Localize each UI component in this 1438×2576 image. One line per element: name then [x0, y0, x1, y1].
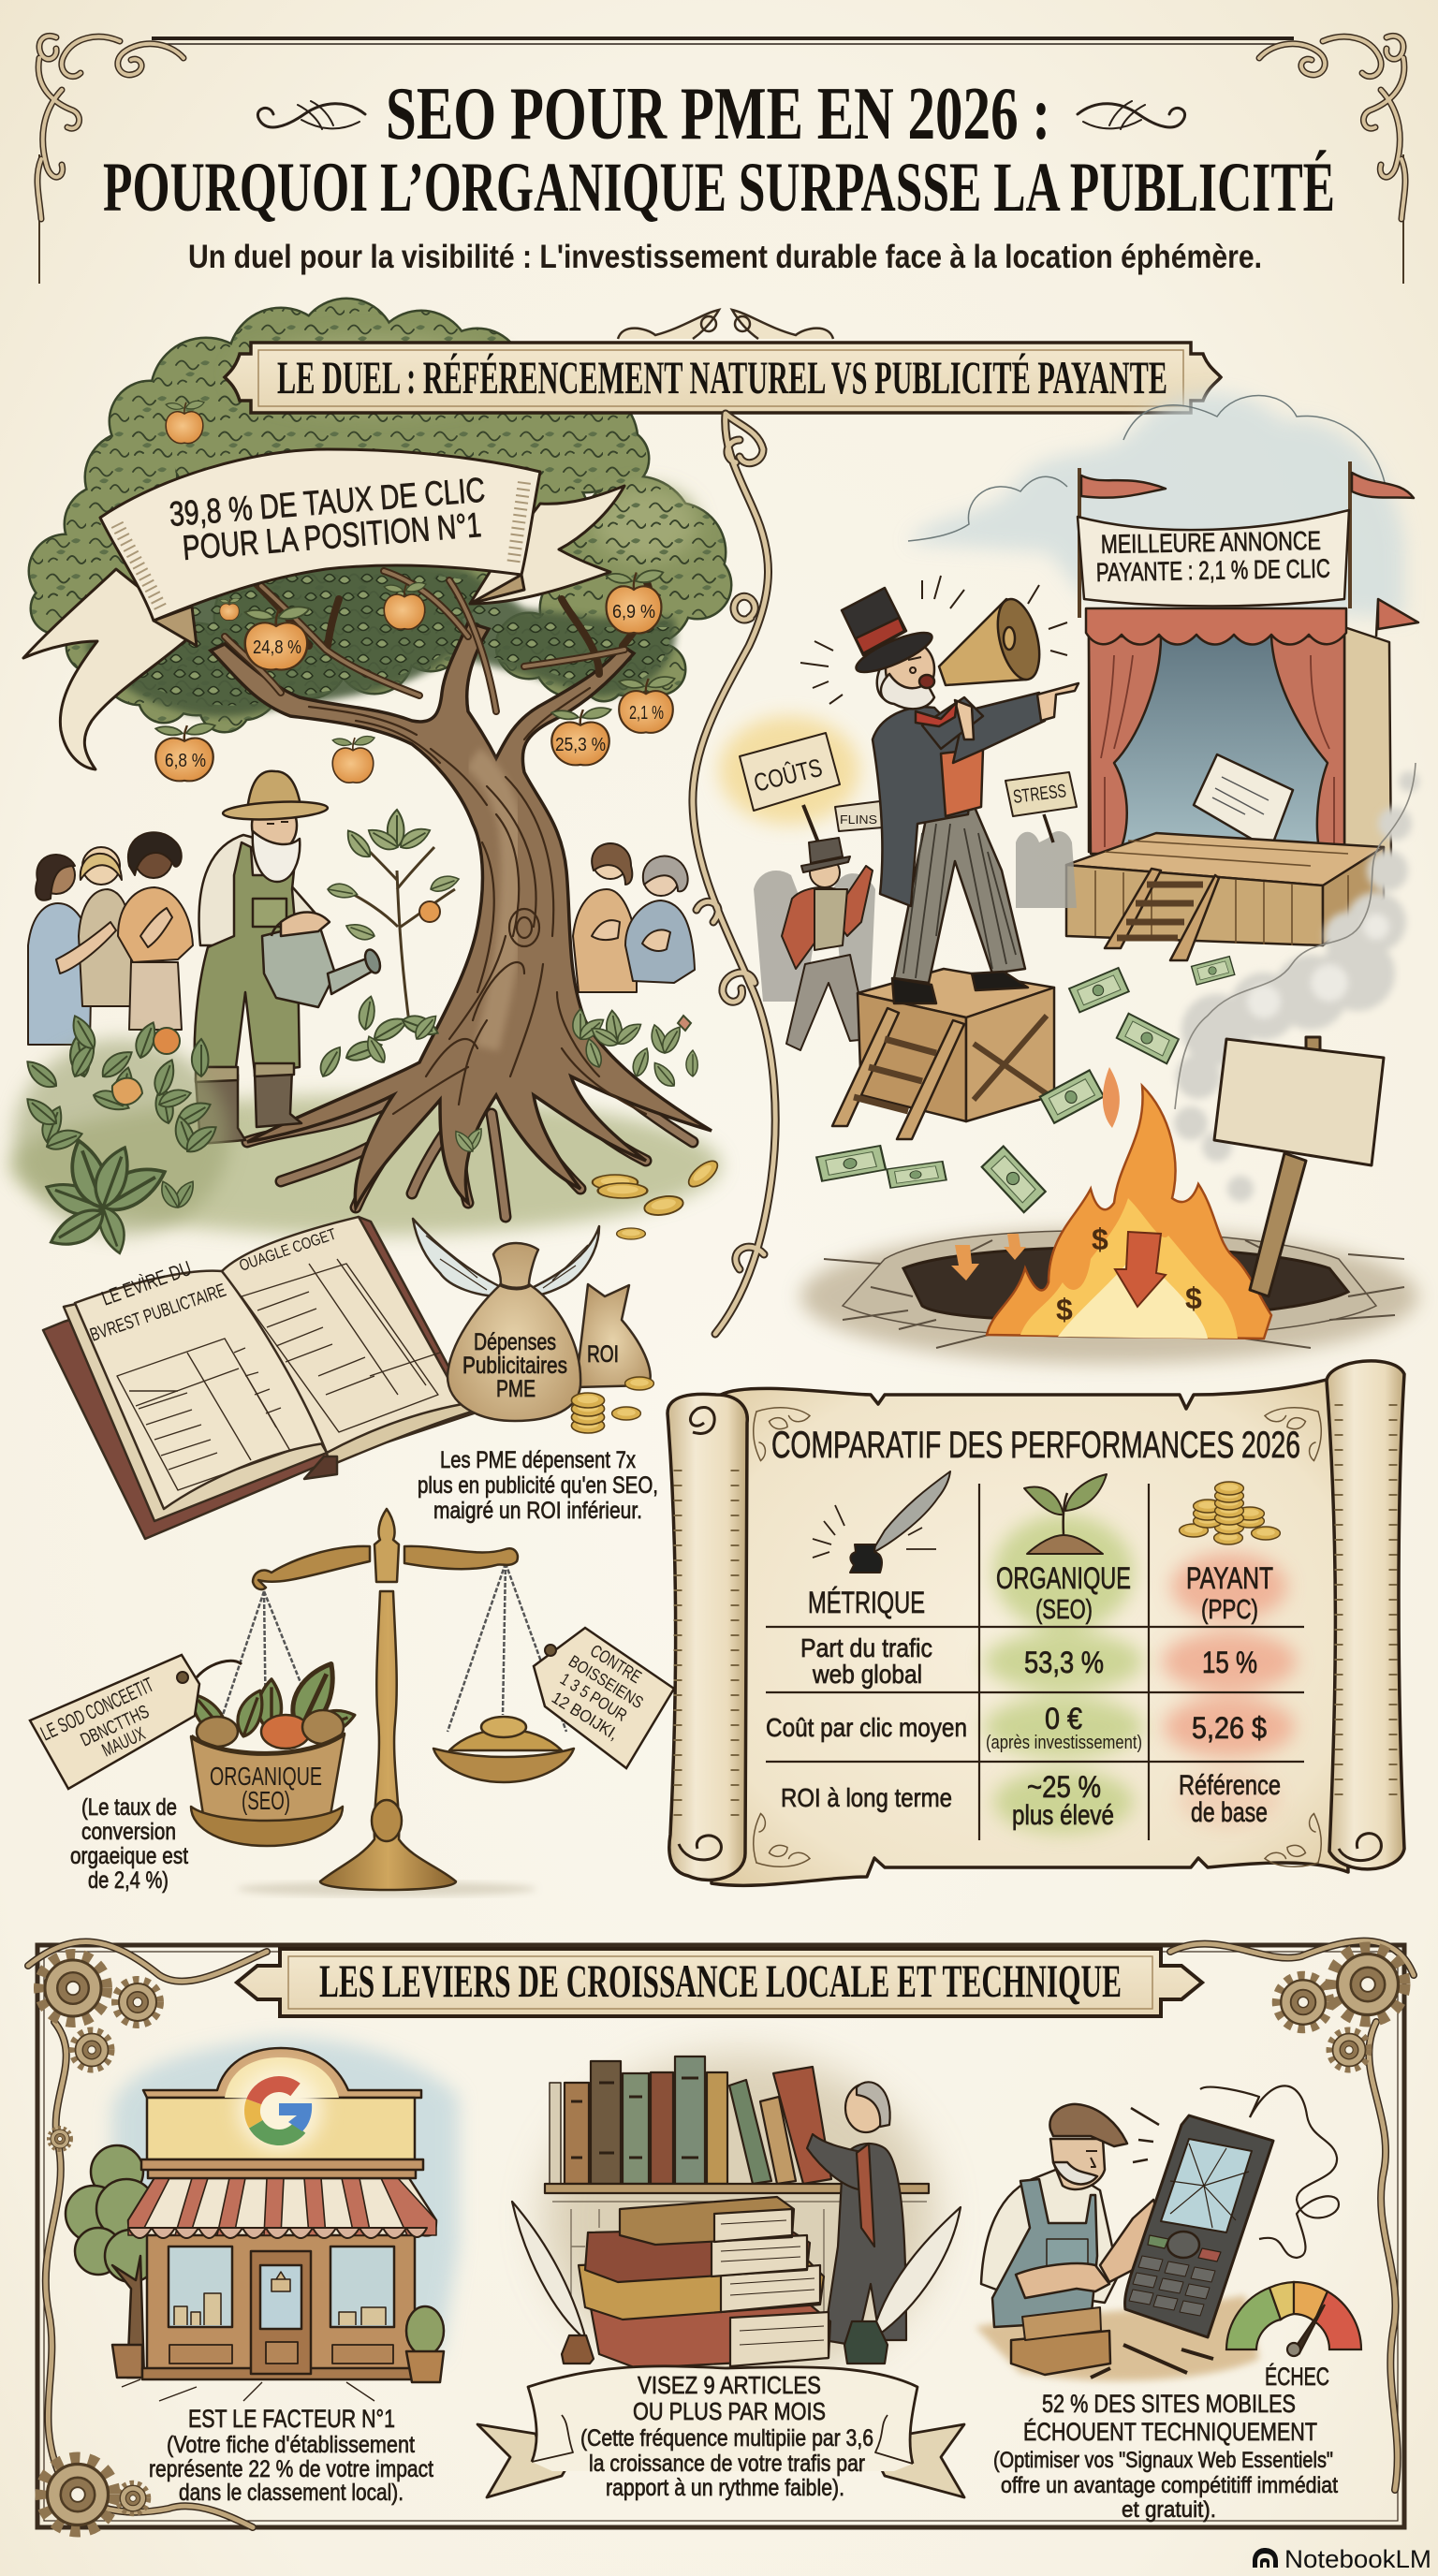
clouds [908, 393, 1404, 618]
farmer with watering can [195, 771, 383, 1144]
column headers: PAYANT [1186, 1561, 1273, 1595]
tools [1091, 2345, 1213, 2378]
flames [987, 1086, 1271, 1339]
table rules [766, 1484, 1304, 1840]
ribbon text: articles: la croissance de votre trafis par [589, 2451, 865, 2477]
flag poles [1079, 461, 1350, 618]
chains [217, 1563, 566, 1732]
caption: mobile failures [993, 2390, 1338, 2523]
ribbon text: articles: VISEZ 9 ARTICLES [638, 2371, 821, 2399]
caption: mobile failures: et gratuit). [1122, 2497, 1216, 2523]
phone [1125, 2115, 1273, 2337]
bushes and flowers [14, 1009, 697, 1256]
shelf [545, 2184, 929, 2193]
scroll comparison table [668, 1361, 1404, 1885]
circus stage tent [1066, 461, 1418, 960]
shelf books [550, 2056, 831, 2184]
megaphone [939, 599, 1033, 685]
tent banner [1078, 510, 1349, 607]
row: long-term ROI: de base [1191, 1797, 1268, 1828]
shout rays [800, 576, 1067, 704]
row: traffic share: Part du trafic [800, 1633, 932, 1662]
header frame [37, 36, 1405, 284]
fire pit: $ [1056, 1293, 1073, 1326]
organic column wash [984, 1515, 1143, 1834]
pole and base [237, 1881, 536, 1896]
column headers: (SEO) [1035, 1595, 1093, 1625]
panels [169, 2342, 393, 2364]
row: traffic share: web global [812, 1660, 922, 1689]
door [251, 2251, 311, 2374]
tree: organic growth [9, 300, 730, 1256]
tent side [1344, 627, 1391, 866]
trunk and roots [211, 571, 712, 1217]
row: long-term ROI: ~25 % [1027, 1770, 1101, 1804]
coin stack by bags [571, 1377, 653, 1433]
workbench [976, 2295, 1259, 2380]
title [103, 73, 1335, 227]
admiring people right [573, 843, 695, 992]
row: cost per click: 5,26 $ [1192, 1711, 1267, 1745]
ledger handwriting: OUAGLE COGET [237, 1225, 338, 1275]
window goods [174, 2293, 386, 2325]
tag right: 1 3 5 POUR [557, 1669, 630, 1725]
caption: conversion: conversion [81, 1819, 176, 1845]
caption: local factor: dans le classement local). [179, 2480, 404, 2506]
money bag labels: ROI [587, 1341, 619, 1368]
sapling [315, 810, 461, 1079]
caption: mobile failures: ÉCHOUENT TECHNIQUEMENT [1023, 2418, 1317, 2446]
shoes [892, 972, 1028, 1003]
tag left: DBNCTTHS [78, 1702, 153, 1751]
tree [66, 2145, 157, 2378]
speed gauge [1226, 2282, 1361, 2356]
gears [39, 1948, 1404, 2531]
caption: conversion: de 2,4 %) [88, 1867, 169, 1894]
crowd with protest signs: FLINS [840, 812, 877, 827]
quills and ink [512, 2202, 961, 2364]
row: cost per click: Coût par clic moyen [766, 1713, 967, 1742]
icon: coin stacks [1180, 1482, 1280, 1544]
shopfront with google sign [66, 2039, 459, 2401]
right roll [1327, 1361, 1404, 1869]
crowd with protest signs [719, 716, 1077, 1050]
caption: mobile failures: offre un avantage compétitiff immédiat [1001, 2473, 1338, 2498]
backdrop [1089, 627, 1344, 852]
money bag labels: PME [496, 1376, 536, 1402]
gauge label: ÉCHEC [1265, 2363, 1329, 2391]
ribbon text: 39,8 % DE TAUX DE CLIC [168, 471, 487, 534]
costs sign with glow [719, 716, 859, 825]
valance [1086, 608, 1346, 644]
fire pit [800, 1067, 1418, 1364]
ribbon text: articles: OU PLUS PAR MOIS [633, 2397, 826, 2425]
top hat [842, 588, 906, 655]
winged money bags [413, 1219, 651, 1421]
veggie basket [183, 1656, 358, 1846]
open ledger book [43, 1217, 474, 1539]
balance scale [183, 1509, 574, 1896]
basket label [210, 1762, 322, 1815]
ribbon text: articles [580, 2371, 873, 2501]
small sign [835, 801, 883, 831]
caption: mobile failures: (Optimiser vos "Signaux Web Essentiels" [993, 2448, 1333, 2473]
parchment sheet [712, 1376, 1348, 1885]
left roll [668, 1394, 747, 1880]
money bag labels: Publicitaires [462, 1353, 567, 1379]
smoke plume [1174, 763, 1419, 1202]
apple fruits: 6,9 % [612, 602, 655, 622]
ledger handwriting [87, 1225, 338, 1346]
falling money [816, 956, 1235, 1214]
apple fruits: 24,8 % [253, 637, 301, 658]
section banner: local and technical levers [237, 1949, 1202, 2016]
awning [128, 2178, 436, 2235]
row: traffic share: 15 % [1202, 1646, 1257, 1679]
tag left: LE SOD CONCEETIT [37, 1673, 157, 1746]
notebooklm logo: NotebookLM [1284, 2545, 1431, 2573]
row: long-term ROI [781, 1770, 1281, 1831]
ribbon text: articles: (Cette fréquence multipiie par 3,6 [580, 2425, 873, 2452]
crowd with protest signs: COÛTS [751, 753, 825, 798]
windows [169, 2247, 232, 2327]
money bag labels [462, 1329, 619, 1402]
face and cap [1050, 2139, 1105, 2189]
tag right [534, 1628, 674, 1768]
ribbon: articles [477, 2366, 964, 2497]
basket label: (SEO) [242, 1786, 290, 1815]
caption: spending [418, 1447, 658, 1524]
arms [1016, 2263, 1109, 2298]
coins pan [433, 1717, 574, 1782]
arrows and dollars [1115, 1232, 1166, 1307]
row: long-term ROI: plus élevé [1012, 1800, 1114, 1831]
grey crowd [754, 831, 1077, 1002]
stage platform [1066, 833, 1384, 886]
tag right: CONTRE [586, 1641, 644, 1688]
icon: sprout [1024, 1474, 1107, 1554]
stage steps [1105, 869, 1219, 960]
ribbon text: articles: rapport à un rythme faible). [606, 2475, 844, 2501]
caption: local factor: (Votre fiche d'établissement [167, 2432, 415, 2458]
cable [1250, 2086, 1339, 2258]
section banner: le duel [225, 310, 1221, 413]
curtains [1089, 637, 1161, 854]
crowd with protest signs: STRESS [1012, 781, 1067, 808]
stress sign [1044, 814, 1053, 842]
cracked ground [800, 1229, 1418, 1364]
row: cost per click: (après investissement) [986, 1733, 1142, 1753]
canopy [30, 300, 730, 731]
scroll corner ornaments [754, 1408, 1321, 1866]
facade [147, 2232, 415, 2378]
head [877, 660, 903, 702]
potted plant [406, 2306, 444, 2382]
phone repairman [976, 2086, 1339, 2380]
row: traffic share [800, 1633, 1257, 1689]
legs [894, 805, 1025, 983]
apple fruits: 25,3 % [555, 735, 606, 755]
caption: local factor: EST LE FACTEUR N°1 [188, 2405, 395, 2433]
column headers [808, 1561, 1273, 1625]
money bag labels: Dépenses [474, 1329, 556, 1355]
gold coins [593, 1156, 722, 1239]
row: long-term ROI: Référence [1179, 1770, 1281, 1801]
ornamental vine divider [693, 414, 775, 1334]
ribbon banner: click rate [23, 449, 624, 769]
row: long-term ROI: ROI à long terme [781, 1783, 952, 1812]
paid column wash [1162, 1553, 1297, 1827]
bookshelf and librarian [512, 2055, 961, 2382]
toolbox [1011, 2331, 1110, 2375]
tent banner text: PAYANTE : 2,1 % DE CLIC [1096, 554, 1330, 587]
ledger handwriting: LE EVÌRE DU [98, 1256, 195, 1310]
caption: local factor: représente 22 % de votre impact [149, 2456, 433, 2482]
ringmaster with megaphone on crate [800, 576, 1078, 1139]
caption: conversion: orgaeique est [70, 1843, 188, 1869]
apple fruits: 6,8 % [165, 751, 206, 771]
tent banner text [1096, 526, 1330, 587]
row: cost per click [766, 1702, 1267, 1753]
title: SEO POUR PME EN 2026 : [386, 73, 1050, 155]
sign [143, 2048, 421, 2098]
subtitle: Un duel pour la visibilité : L'investissement durable face à la location éphémère. [188, 239, 1262, 275]
admiring people left [28, 832, 193, 1045]
tag right: BOISSEIENS [565, 1651, 647, 1712]
column headers: MÉTRIQUE [808, 1586, 925, 1619]
caption: mobile failures: 52 % DES SITES MOBILES [1042, 2390, 1296, 2418]
google G [252, 2084, 312, 2137]
ledger handwriting: BVREST PUBLICTAIRE [87, 1280, 228, 1346]
column headers: (PPC) [1201, 1595, 1258, 1625]
caption: conversion: (Le taux de [81, 1794, 177, 1821]
caption: spending: plus en publicité qu'en SEO, [418, 1472, 658, 1499]
column headers: ORGANIQUE [996, 1561, 1131, 1595]
caption: spending: maigré un ROI inférieur. [433, 1498, 642, 1524]
sky wash [112, 2039, 459, 2359]
basket label: ORGANIQUE [210, 1762, 322, 1791]
row: cost per click: 0 € [1045, 1702, 1082, 1735]
shirt and apron [981, 2167, 1123, 2303]
tent banner text: MEILLEURE ANNONCE [1101, 526, 1321, 559]
caption: local factor [149, 2405, 433, 2506]
fire pit: $ [1092, 1222, 1108, 1256]
ribbon text [168, 471, 487, 567]
tag right: 12 BOIJKI, [549, 1688, 622, 1744]
librarian [824, 2144, 906, 2346]
tag left: MAUUX [99, 1723, 149, 1762]
caption: conversion [70, 1794, 188, 1894]
blank wooden sign [1214, 1037, 1384, 1296]
caption: spending: Les PME dépensent 7x [440, 1447, 636, 1473]
man in red coat [782, 866, 873, 969]
crate [832, 969, 1054, 1139]
lower panel frame [28, 1941, 1414, 2527]
apple fruits [155, 401, 675, 783]
apple fruits: 2,1 % [629, 703, 664, 724]
coat [873, 707, 974, 906]
fire pit: $ [1185, 1281, 1202, 1315]
row: traffic share: 53,3 % [1024, 1646, 1104, 1679]
icon: quill and inkwell [813, 1471, 950, 1573]
ribbon text: POUR LA POSITION N°1 [181, 505, 483, 567]
tag left [30, 1655, 242, 1789]
room wash [543, 2055, 936, 2382]
ground wash [9, 1095, 721, 1236]
poster [1194, 754, 1293, 850]
big book stack [579, 2197, 830, 2368]
